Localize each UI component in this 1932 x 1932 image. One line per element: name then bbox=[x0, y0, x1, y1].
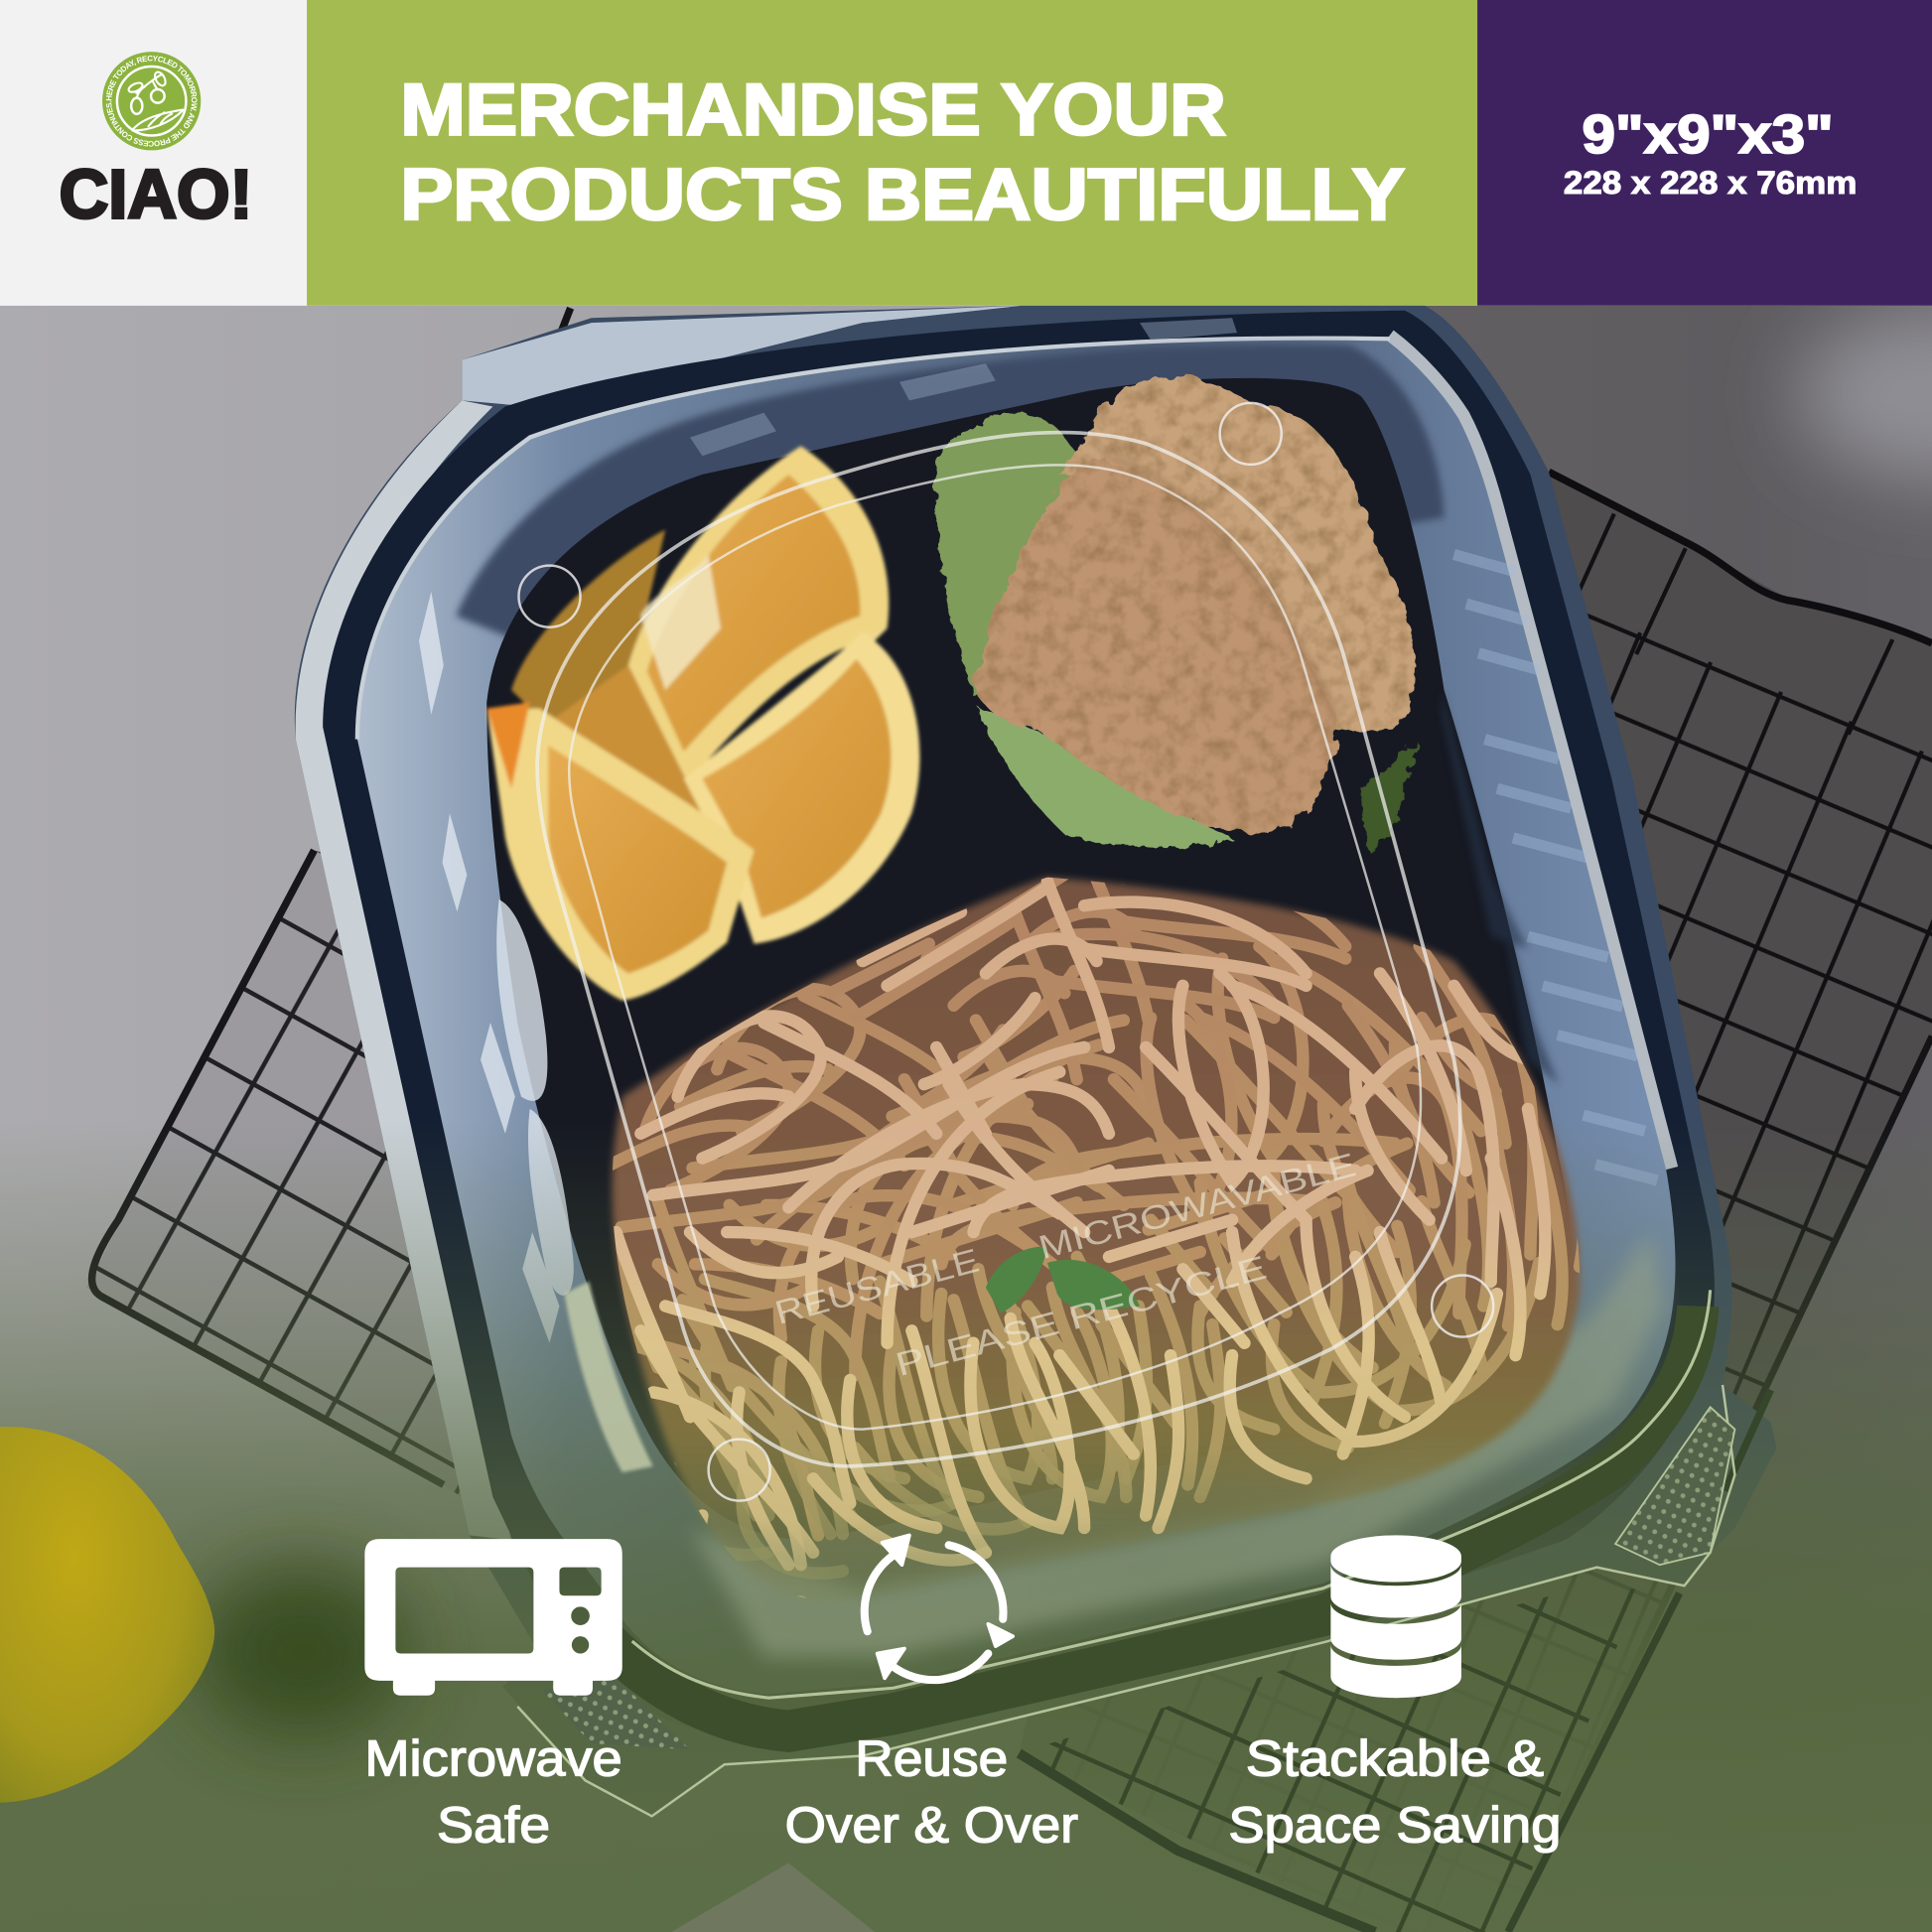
clear lid insert outline bbox=[537, 432, 1460, 1466]
label: microwave safe: Microwave bbox=[364, 1729, 622, 1786]
embossed lid text: MICROWAVABLE bbox=[1035, 1147, 1360, 1267]
logo panel bbox=[0, 0, 307, 306]
size panel bbox=[1477, 0, 1932, 306]
title line 2: PRODUCTS BEAUTIFULLY bbox=[400, 154, 1405, 235]
outer light flange left bbox=[296, 400, 511, 1540]
label: microwave safe: Safe bbox=[437, 1796, 550, 1853]
silver lid edge left bbox=[357, 339, 1390, 740]
lemon shadow bbox=[198, 1565, 407, 1737]
wire rack: right part bbox=[548, 308, 1932, 1932]
label: reuse over and over bbox=[785, 1729, 1078, 1853]
orange behind slice bbox=[511, 530, 665, 740]
lighter table at upper right bbox=[1799, 308, 1932, 481]
dark rim groove bbox=[323, 311, 1715, 1739]
top lid notches bbox=[690, 318, 1237, 456]
lower lid pale area bbox=[690, 1232, 1663, 1657]
header band bbox=[0, 0, 1932, 306]
icon: microwave bbox=[364, 1539, 622, 1696]
upper lid shade bbox=[456, 345, 1445, 640]
label: stackable and space saving: Stackable & bbox=[1246, 1729, 1544, 1786]
embossed lid text: REUSABLE bbox=[771, 1243, 983, 1332]
label: reuse over and over: Over & Over bbox=[785, 1796, 1078, 1853]
mint leaves bbox=[986, 1247, 1140, 1313]
label: microwave safe bbox=[364, 1729, 622, 1853]
chicken bbox=[973, 375, 1414, 833]
orange slice top bbox=[628, 446, 889, 782]
right lid dark patches bbox=[1442, 690, 1559, 1084]
oranges bbox=[486, 446, 919, 1001]
label: reuse over and over: Reuse bbox=[855, 1729, 1008, 1786]
size millimetres: 228 x 228 x 76mm bbox=[1564, 165, 1857, 201]
lemon bbox=[0, 1427, 214, 1803]
spaghetti strands bbox=[584, 854, 1585, 1604]
orange slice left bbox=[486, 709, 755, 1001]
right lid stripes bbox=[1453, 554, 1657, 1180]
size inches: 9"x9"x3" bbox=[1583, 104, 1834, 165]
tab highlight bbox=[462, 306, 1023, 407]
lower left light lid area bbox=[564, 1282, 653, 1472]
title line 1: MERCHANDISE YOUR bbox=[400, 69, 1226, 150]
silver lid edge bbox=[1390, 336, 1672, 1169]
lower rack grid bbox=[1019, 1390, 1770, 1932]
lettuce bbox=[935, 414, 1417, 850]
orange slice right bbox=[684, 632, 919, 944]
wire rack: left part bbox=[86, 850, 579, 1578]
left scallop highlights bbox=[419, 592, 574, 1343]
chicken fold shadow bbox=[1109, 459, 1337, 721]
logo badge: HERE TODAY, RECYCLED TOMORROW. AND THE PROCESS CONTINUES. bbox=[105, 56, 197, 147]
back chicken piece bbox=[1059, 375, 1414, 733]
front chicken piece bbox=[973, 459, 1337, 833]
label: stackable and space saving bbox=[1228, 1729, 1561, 1853]
container flange and tabs bbox=[295, 306, 1777, 1816]
embossed lid text bbox=[771, 1147, 1360, 1384]
cloth fold bbox=[671, 1863, 875, 1932]
translucent lid interior bbox=[357, 339, 1676, 1694]
orange backing bbox=[542, 665, 763, 850]
orange peel edge bbox=[486, 702, 530, 788]
icon: recycle arrows bbox=[865, 1535, 1013, 1680]
title panel bbox=[307, 0, 1477, 306]
lower rim dark band and lines bbox=[517, 1290, 1734, 1816]
label: stackable and space saving: Space Saving bbox=[1228, 1796, 1561, 1853]
spaghetti bbox=[584, 854, 1585, 1604]
icon: stacked cylinders bbox=[1330, 1535, 1461, 1698]
feature: microwave safe bbox=[364, 1539, 622, 1853]
lid circle marks bbox=[518, 403, 1493, 1501]
spaghetti base bbox=[613, 878, 1580, 1601]
embossed lid text: PLEASE RECYCLE bbox=[892, 1250, 1271, 1384]
feature: stackable bbox=[1228, 1535, 1561, 1853]
feature: reuse bbox=[785, 1535, 1078, 1853]
inner tray dark bbox=[486, 378, 1570, 1540]
logo wordmark: CIAO! bbox=[60, 156, 252, 233]
orange seam bbox=[688, 628, 888, 788]
